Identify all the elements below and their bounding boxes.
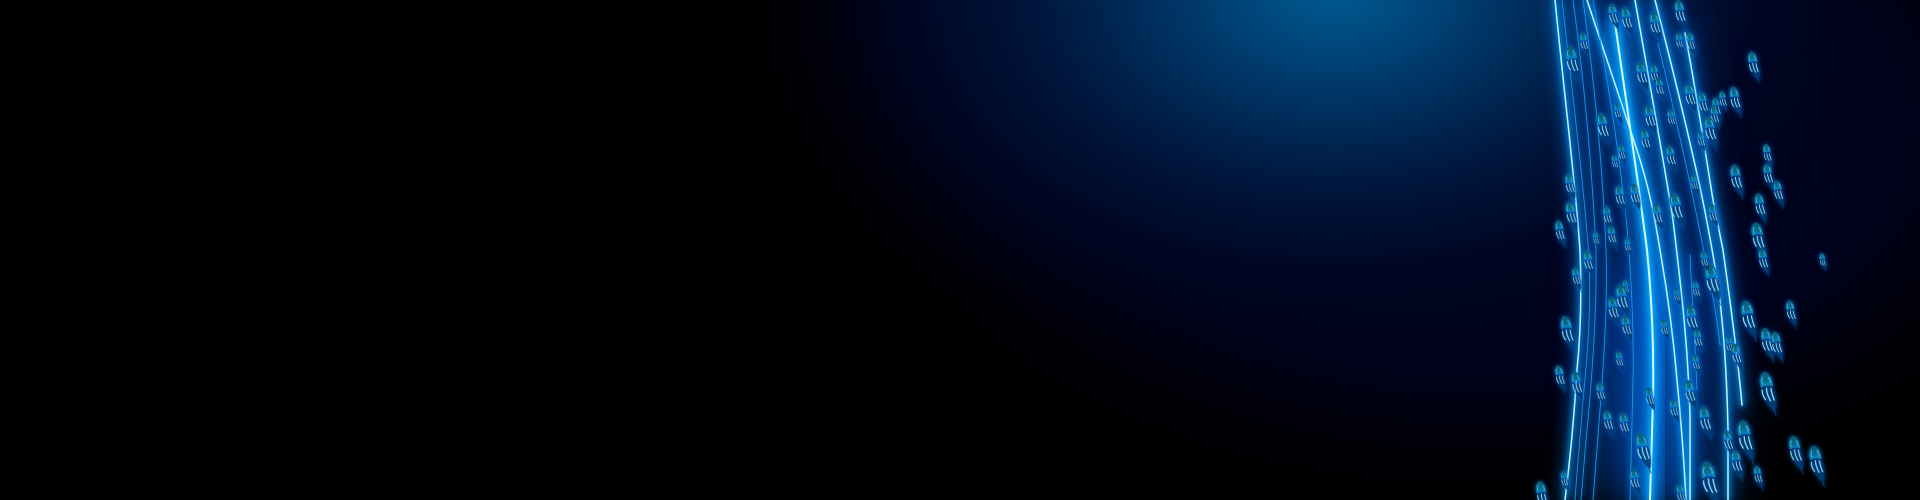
light strands: [1555, 0, 1742, 500]
jellyfish swarm, upper half: [1554, 0, 1786, 262]
jellyfish swarm, lower half: [1535, 248, 1828, 500]
strip glow: [1590, 0, 1740, 500]
